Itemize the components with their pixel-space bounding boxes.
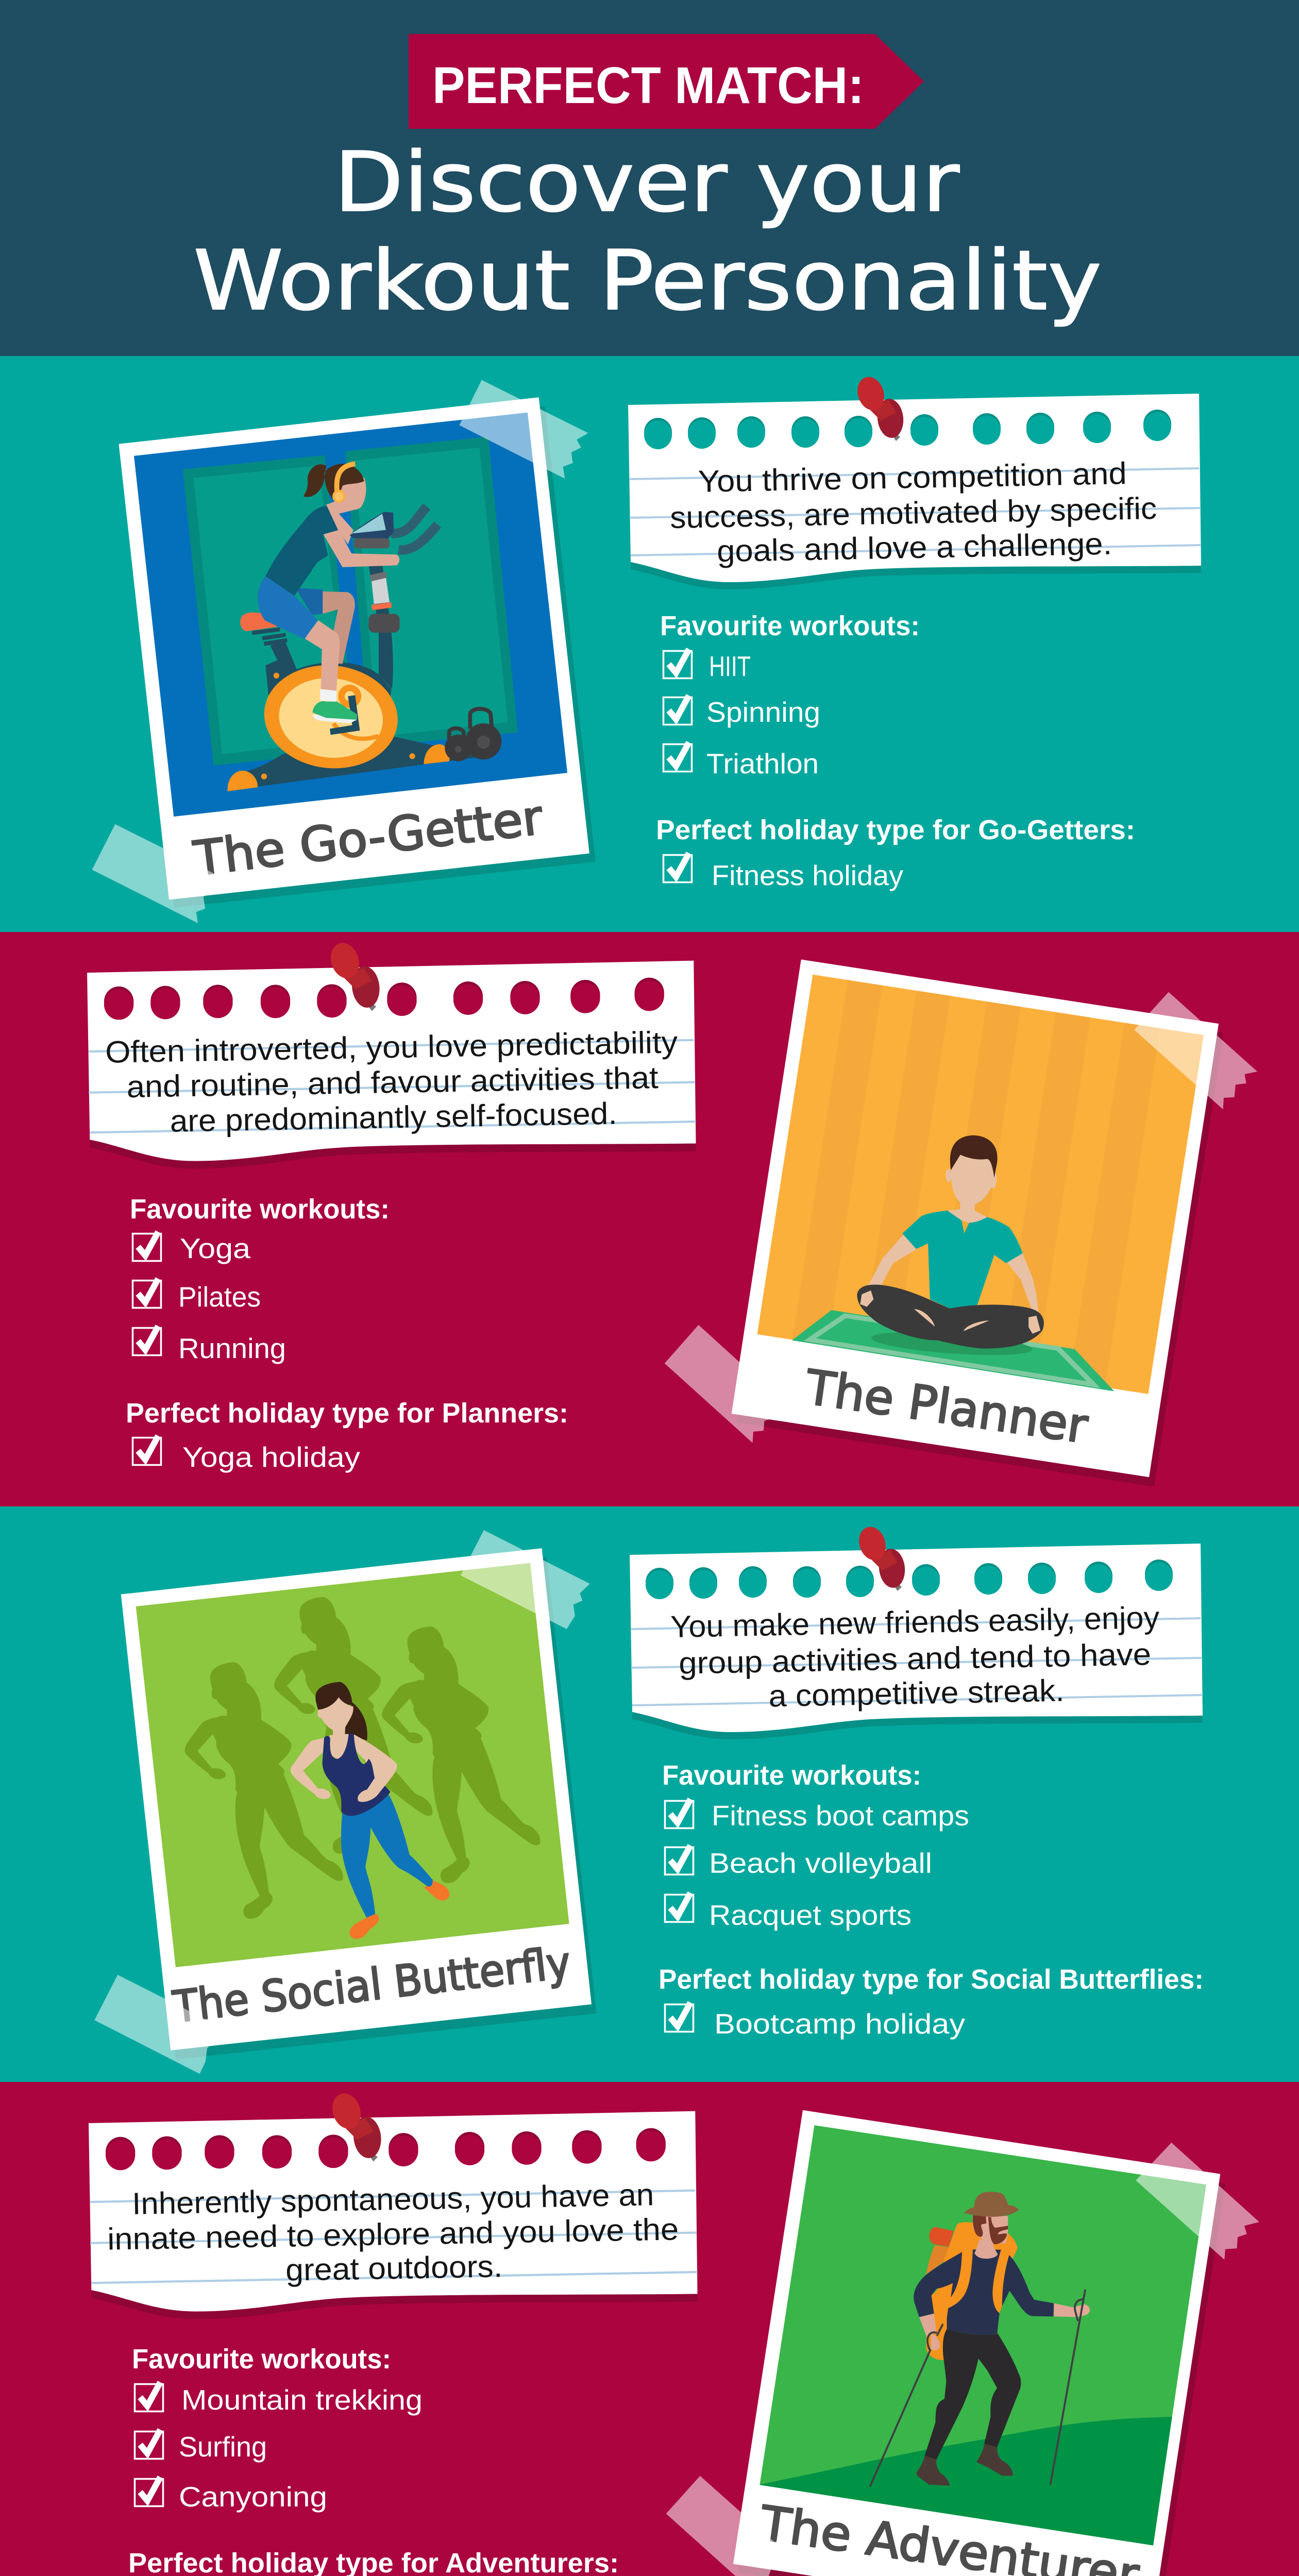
list: holiday type: Bootcamp holiday [714,2008,966,2040]
list: favourite workouts: Pilates [178,1281,261,1313]
illustration: woman and shadow figures [185,1597,541,1939]
list: holiday type: Yoga holiday [182,1441,361,1473]
tape: bottom left [94,1975,224,2074]
list: holiday type [656,815,1135,891]
banner: Perfect Match [409,34,924,129]
note: Social Butterfly description: You make new friends easily, enjoy [670,1600,1160,1644]
list: favourite workouts: Spinning [706,696,820,728]
list: favourite workouts: Favourite workouts: [130,1194,390,1225]
list: favourite workouts: Beach volleyball [709,1847,932,1879]
list: favourite workouts: Favourite workouts: [662,1760,921,1791]
list: holiday type: Fitness holiday [712,859,903,891]
title: Discover your [334,134,959,230]
note: Adventurer description [89,2090,698,2319]
note: Go-Getter description [628,374,1201,589]
note: Planner description [87,939,696,1168]
list: favourite workouts: Triathlon [706,748,819,779]
banner: Perfect Match: PERFECT MATCH: [432,57,864,114]
illustration: hiker with poles [870,2192,1090,2487]
note: Planner description: Often introverted, you love predictability [105,1025,678,1070]
list: favourite workouts: Yoga [180,1232,250,1264]
list: holiday type [659,1964,1204,2040]
list: favourite workouts [132,2344,423,2513]
list: favourite workouts [660,611,920,779]
polaroid caption: The Social Butterfly [170,1937,573,2032]
list: favourite workouts: Canyoning [179,2481,327,2513]
list: favourite workouts: Mountain trekking [181,2384,423,2416]
note: Adventurer description: great outdoors. [285,2249,503,2287]
list: holiday type: Perfect holiday type for Go-Getters: [656,815,1135,845]
polaroid: The Planner [665,959,1257,1486]
note: Planner description: are predominantly self-focused. [170,1096,617,1139]
title [193,134,1102,329]
polaroid caption: The Planner [802,1360,1091,1454]
list: favourite workouts: Favourite workouts: [660,611,920,641]
panel: The Social Butterfly [0,1506,1299,2082]
list: holiday type: Perfect holiday type for Social Butterflies: [659,1964,1204,1995]
polaroid caption: The Go-Getter [191,790,546,887]
note: Social Butterfly description: a competitive streak. [768,1673,1065,1714]
title: Workout Personality [193,232,1102,329]
tape: top right [1136,2143,1259,2260]
note: Adventurer description: Inherently spontaneous, you have an [132,2177,654,2221]
list: holiday type [126,1398,568,1473]
list: favourite workouts [130,1194,390,1364]
tape: top right [459,380,588,479]
note: Social Butterfly description: group activities and tend to have [679,1637,1152,1681]
list: holiday type: Perfect holiday type for Planners: [126,1398,568,1429]
list: favourite workouts: Surfing [179,2431,267,2463]
polaroid: The Social Butterfly [94,1530,597,2074]
list: favourite workouts: Fitness boot camps [712,1800,969,1832]
tape: top right [461,1530,590,1629]
illustration: woman on exercise bike [228,464,501,791]
panel: The Go-Getter [0,356,1299,932]
list: favourite workouts: Racquet sports [709,1899,912,1931]
list: favourite workouts: HIIT [709,650,751,682]
tape: bottom left [666,2476,789,2576]
panel: The Adventurer [0,2082,1299,2576]
note: Go-Getter description: You thrive on competition and [698,456,1127,499]
note: Social Butterfly description [630,1523,1203,1739]
note: Go-Getter description: goals and love a challenge. [717,527,1112,568]
list: favourite workouts [662,1760,969,1931]
tape: top right [1134,992,1257,1109]
note: Planner description: and routine, and favour activities that [126,1060,659,1104]
tape: bottom left [665,1325,786,1443]
polaroid: The Adventurer [666,2110,1259,2576]
illustration: man meditating [792,1136,1114,1391]
panel: The Planner [0,932,1299,1506]
tape: bottom left [92,824,221,923]
note: Adventurer description: innate need to explore and you love the [107,2212,679,2257]
header band [0,0,1299,356]
note: Go-Getter description: success, are motivated by specific [670,491,1157,535]
polaroid: The Go-Getter [92,380,596,923]
list: favourite workouts: Favourite workouts: [132,2344,391,2375]
list: favourite workouts: Running [178,1332,286,1364]
